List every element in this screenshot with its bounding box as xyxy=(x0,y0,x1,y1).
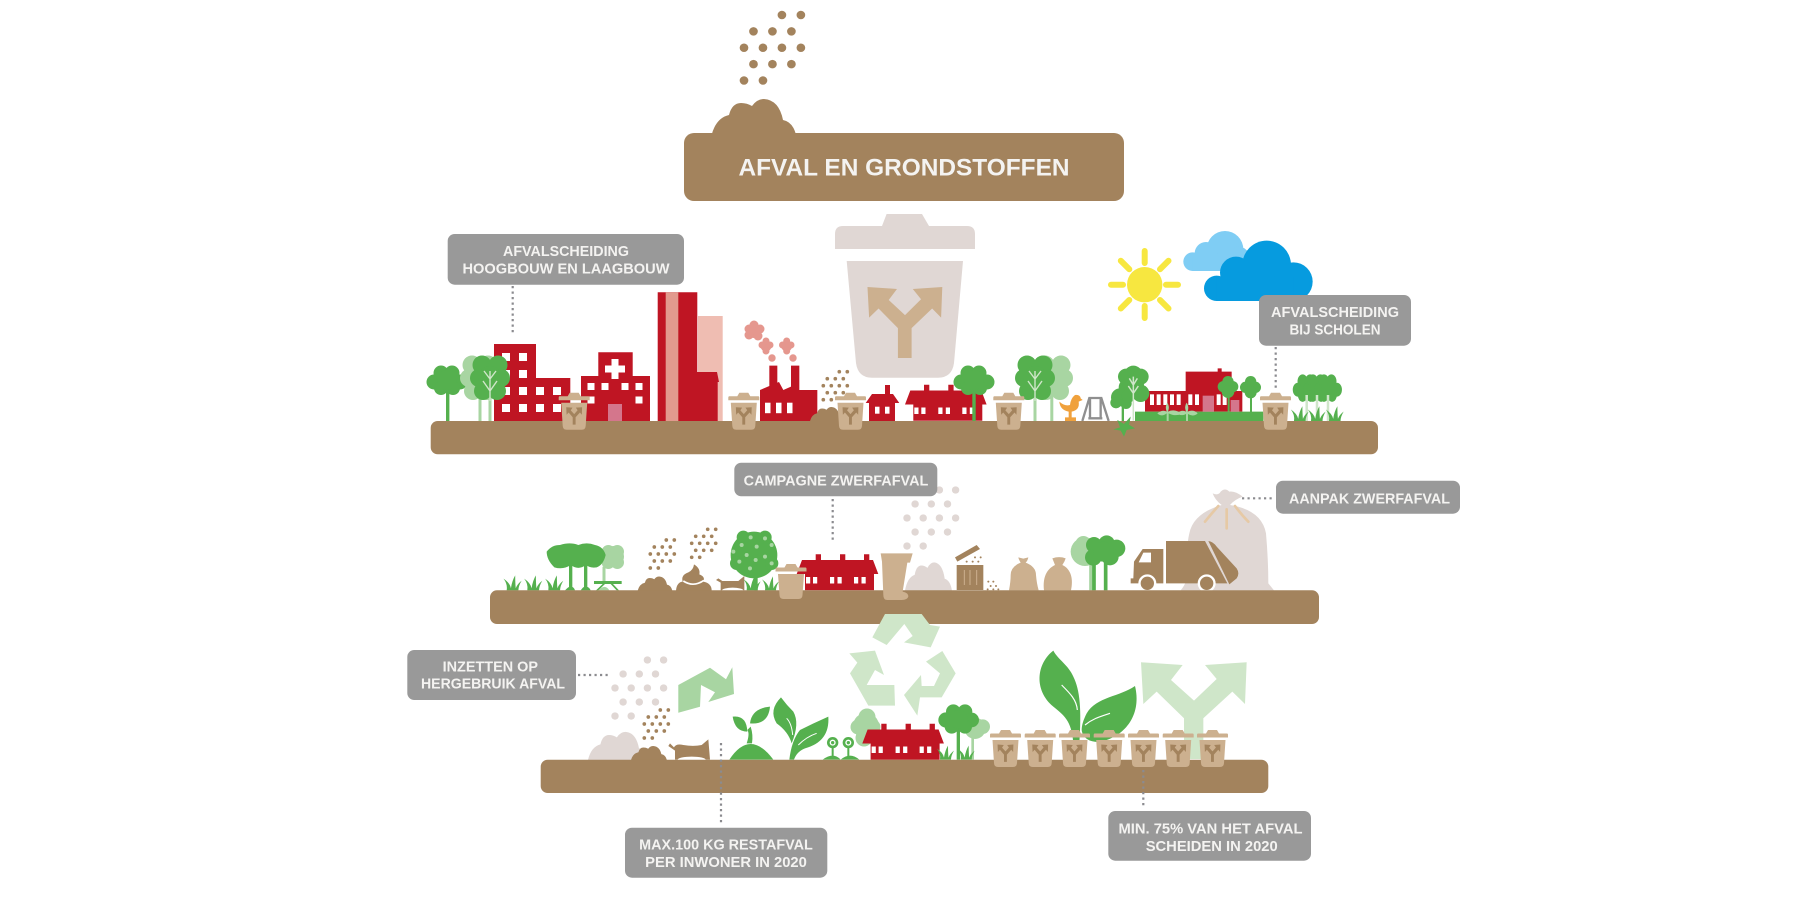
icon: large waste bin xyxy=(835,214,975,378)
tree in front of houses xyxy=(954,366,994,421)
callout: aanpak zwerfafval: AANPAK ZWERFAFVAL xyxy=(1289,490,1450,507)
round fruit tree with grass xyxy=(730,531,779,590)
icon: dog waste xyxy=(676,564,712,591)
trees and grass right xyxy=(1291,374,1344,421)
icon: dog xyxy=(668,739,710,763)
icon: soil mound xyxy=(712,99,796,135)
ground bar 1 xyxy=(431,421,1378,454)
front bin row 2 xyxy=(776,564,806,599)
icon: young plant xyxy=(773,697,828,760)
building: hospital xyxy=(581,352,650,421)
long house xyxy=(862,724,944,760)
building: apartment block xyxy=(494,344,570,421)
brown particles and mound xyxy=(631,708,670,760)
callout: max 100 kg restafval xyxy=(625,743,827,878)
trees left xyxy=(426,356,500,421)
icon: wheelie bin xyxy=(881,553,913,600)
callout: campagne zwerfafval: CAMPAGNE ZWERFAFVAL xyxy=(744,472,928,489)
icon: clouds xyxy=(1183,231,1313,301)
tree in front of apartments xyxy=(470,356,510,421)
grey mound and light particles xyxy=(588,656,667,760)
icon: sprout xyxy=(729,707,773,760)
bins row 3 xyxy=(990,730,1228,767)
bins row 1 xyxy=(559,393,1291,430)
weed on ground xyxy=(1113,417,1135,437)
panel: row 1 city xyxy=(426,214,1411,454)
light tree behind house xyxy=(850,708,880,746)
icon: swing xyxy=(1082,398,1109,421)
trees and grass xyxy=(937,704,990,760)
callout: hoogbouw en laagbouw: HOOGBOUW EN LAAGBOUW xyxy=(462,260,670,278)
callout: hergebruik afval: INZETTEN OP xyxy=(443,658,538,675)
row houses xyxy=(905,385,987,421)
icon: spring rider duck xyxy=(1059,395,1083,421)
icon: flowers xyxy=(823,737,859,760)
particles and mound xyxy=(810,370,849,421)
icon: open trash can xyxy=(955,545,999,590)
ground bar 2 xyxy=(490,590,1319,624)
grey mound and light particles xyxy=(903,486,959,590)
icon: large split arrow xyxy=(1141,662,1247,759)
panel: row 3 reuse xyxy=(407,614,1311,878)
callout: hergebruik afval xyxy=(407,650,611,700)
building: tower xyxy=(658,292,723,421)
callout: min 75 procent scheiden xyxy=(1108,770,1311,861)
icon: recycling symbol xyxy=(849,614,956,716)
ground bar 3 xyxy=(541,760,1268,793)
panel: row 2 litter xyxy=(490,463,1460,624)
building: factory with smoke xyxy=(744,320,817,421)
particles and mound xyxy=(638,527,718,590)
icon: green arrow xyxy=(678,667,734,713)
big garbage bag xyxy=(1181,489,1274,590)
grass and trees left xyxy=(503,543,624,590)
trees right xyxy=(1071,535,1125,590)
callout: max 100 kg restafval: MAX.100 KG RESTAFVAL xyxy=(639,836,813,853)
icon: big leaves xyxy=(1040,651,1137,743)
callout: hoogbouw en laagbouw: AFVALSCHEIDING xyxy=(503,243,629,260)
callout: hergebruik afval: HERGEBRUIK AFVAL xyxy=(421,676,565,693)
title block xyxy=(684,11,1124,201)
icon: dog xyxy=(716,576,744,593)
icon: garbage bags xyxy=(1009,557,1072,590)
icon: sun xyxy=(1111,251,1178,318)
small house xyxy=(866,385,899,421)
callout: aanpak zwerfafval xyxy=(1242,481,1460,514)
title banner xyxy=(684,133,1124,201)
school grounds trees xyxy=(1110,366,1149,437)
callout: hoogbouw en laagbouw xyxy=(448,234,684,334)
callout: scholen: AFVALSCHEIDING xyxy=(1271,304,1399,321)
callout: min 75 procent scheiden: MIN. 75% VAN HET AFVAL xyxy=(1118,821,1302,838)
callout: min 75 procent scheiden: SCHEIDEN IN 2020 xyxy=(1146,838,1278,855)
school building and grass xyxy=(1135,368,1263,421)
long house xyxy=(797,554,878,590)
callout: max 100 kg restafval: PER INWONER IN 2020 xyxy=(645,854,807,871)
icon: garbage truck xyxy=(1131,541,1238,592)
title text: AFVAL EN GRONDSTOFFEN xyxy=(738,154,1070,182)
callout: scholen: BIJ SCHOLEN xyxy=(1290,322,1380,338)
icon: falling particles xyxy=(740,11,805,85)
park trees xyxy=(1015,356,1073,421)
callout: scholen xyxy=(1259,295,1411,390)
callout: campagne zwerfafval xyxy=(734,463,937,543)
